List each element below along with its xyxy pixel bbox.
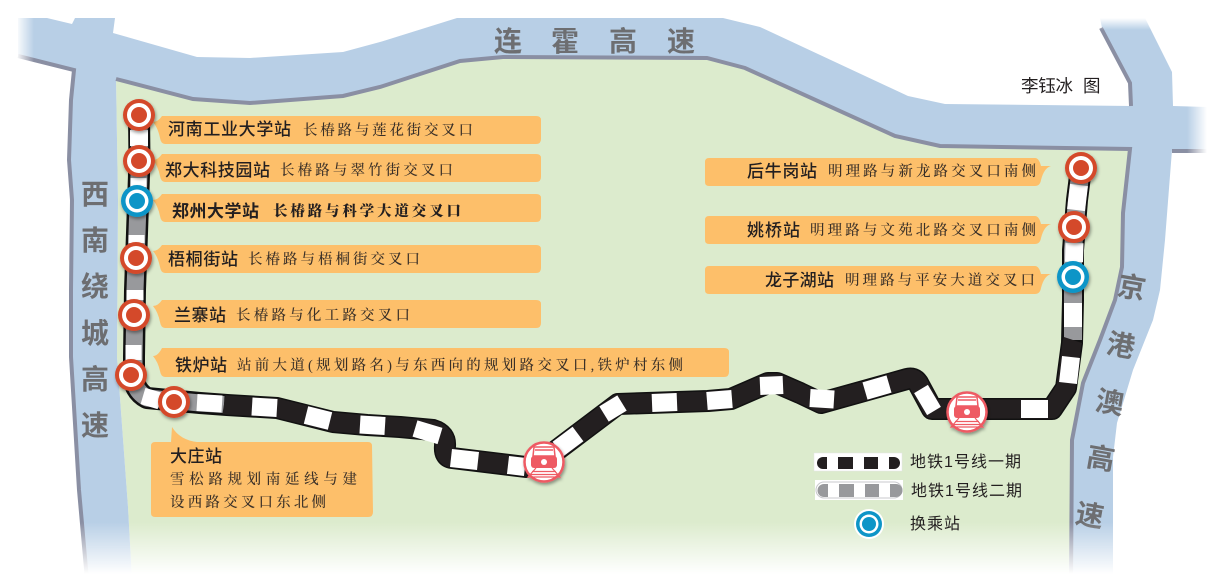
green district area [116, 56, 1130, 580]
legend: phase 1 swatch [814, 453, 902, 471]
road label: 京港澳高速: 京 [1115, 270, 1148, 305]
label: 龙子湖站: 龙子湖站 [765, 271, 834, 290]
icon: train east [948, 392, 986, 432]
road label: 西南绕城高速 [81, 179, 109, 441]
label: 郑州大学站 [153, 194, 541, 222]
station: 郑州大学站 (interchange) [121, 185, 153, 217]
label: 郑州大学站: 长椿路与科学大道交叉口 [273, 202, 461, 220]
road label: 连霍高速: 高 [609, 26, 637, 57]
label: 铁炉站: 站前大道(规划路名)与东西向的规划路交叉口,铁炉村东侧 [237, 356, 683, 374]
label: 大庄站: 雪松路规划南延线与建 [170, 470, 358, 488]
label: 兰寨站: 长椿路与化工路交叉口 [236, 306, 410, 324]
label: 后牛岗站 [705, 158, 1051, 186]
road label: 西南绕城高速: 城 [81, 318, 109, 349]
credit: 李钰冰 图: 李钰冰 [1021, 76, 1074, 96]
label: 郑大科技园站: 长椿路与翠竹街交叉口 [280, 161, 453, 179]
label: 后牛岗站: 明理路与新龙路交叉口南侧 [828, 162, 1036, 180]
label: 河南工业大学站: 河南工业大学站 [168, 119, 291, 139]
label: 龙子湖站: 明理路与平安大道交叉口 [845, 272, 1035, 289]
station: 梧桐街站 [120, 242, 152, 274]
station: 河南工业大学站 [123, 99, 155, 131]
station: 后牛岗站 [1065, 152, 1097, 184]
label: 大庄站: 设西路交叉口东北侧 [170, 494, 326, 511]
road label: 连霍高速: 连 [494, 26, 522, 57]
road label: 西南绕城高速: 西 [81, 179, 109, 210]
label: 龙子湖站 [705, 266, 1051, 294]
label: 河南工业大学站 [153, 116, 541, 144]
black first phase [224, 340, 1073, 467]
label: 姚桥站: 姚桥站 [747, 221, 800, 240]
label: 姚桥站 [705, 216, 1051, 244]
station: 郑大科技园站 [123, 145, 155, 177]
label: 兰寨站: 兰寨站 [174, 306, 226, 325]
legend: phase 2 swatch [815, 480, 903, 500]
label: 大庄站: 大庄站 [170, 447, 222, 466]
road label: 京港澳高速: 澳 [1093, 385, 1126, 420]
road label: 京港澳高速: 港 [1104, 328, 1137, 363]
station: 龙子湖站 (interchange) [1057, 261, 1089, 293]
station: 铁炉站 [115, 359, 147, 391]
label: 梧桐街站 [153, 245, 541, 273]
road label: 京港澳高速: 速 [1073, 498, 1106, 533]
label: 兰寨站 [153, 300, 541, 328]
label: 铁炉站 [153, 348, 729, 377]
label: 郑大科技园站 [153, 154, 541, 182]
legend: interchange text: 换乘站 [910, 515, 960, 533]
gray second phase west [134, 115, 224, 404]
icon: train west [524, 442, 564, 482]
road label: 京港澳高速: 高 [1084, 441, 1117, 476]
road label: 西南绕城高速: 南 [81, 225, 109, 256]
road label: 西南绕城高速: 绕 [81, 271, 109, 302]
road label: 连霍高速: 速 [667, 26, 695, 57]
road label: 西南绕城高速: 高 [81, 364, 109, 395]
legend [814, 453, 1022, 539]
label: 大庄站 [151, 427, 373, 517]
metro line 1 [134, 115, 1081, 467]
label: 郑大科技园站: 郑大科技园站 [165, 161, 270, 180]
road label: 连霍高速: 霍 [551, 26, 579, 57]
label: 郑州大学站: 郑州大学站 [172, 201, 259, 221]
legend: interchange icon [854, 509, 884, 539]
label: 河南工业大学站: 长椿路与莲花街交叉口 [303, 121, 473, 139]
label: 铁炉站: 铁炉站 [175, 356, 227, 375]
station: 姚桥站 [1058, 211, 1090, 243]
label: 后牛岗站: 后牛岗站 [747, 162, 817, 181]
legend: phase 2 text: 地铁1号线二期 [911, 482, 1022, 500]
white track segments [134, 130, 1079, 467]
road label: 西南绕城高速: 速 [81, 410, 109, 441]
road label: 京港澳高速 [1073, 270, 1148, 533]
label: 姚桥站: 明理路与文苑北路交叉口南侧 [810, 221, 1036, 239]
credit: 李钰冰 图: 图 [1083, 76, 1100, 96]
station: 兰寨站 [118, 299, 150, 331]
label: 梧桐街站: 梧桐街站 [168, 250, 238, 269]
label: 梧桐街站: 长椿路与梧桐街交叉口 [248, 250, 420, 268]
line outline [134, 115, 1081, 467]
credit: 李钰冰 图 [1021, 76, 1100, 96]
station: 大庄站 [158, 386, 190, 418]
road label: 连霍高速 [494, 26, 695, 57]
gray second phase east [1073, 168, 1081, 340]
legend: phase 1 text: 地铁1号线一期 [910, 453, 1021, 471]
